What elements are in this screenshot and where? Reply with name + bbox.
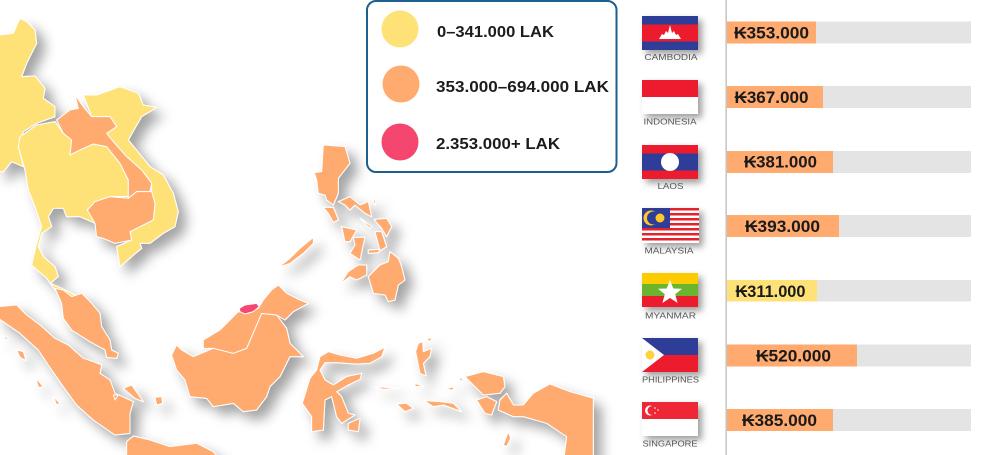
country: Cambodia [87, 192, 155, 243]
country: Philippines [278, 145, 405, 302]
row: Indonesia: INDONESIA [644, 118, 697, 126]
flag: Malaysia [642, 208, 699, 243]
bar: Indonesia: ₭367.000 [734, 89, 808, 107]
bar: Philippines: ₭520.000 [756, 348, 831, 366]
country: Vietnam [83, 87, 178, 267]
legend item: orange range [382, 66, 609, 102]
row: Singapore: SINGAPORE [642, 440, 698, 448]
flag: Singapore [642, 402, 698, 436]
island: Sumatra [0, 305, 133, 435]
bar: Laos [727, 151, 971, 173]
row: Indonesia [642, 80, 971, 126]
country: peninsular Malaysia [55, 288, 118, 358]
country: Laos [57, 95, 152, 198]
flag: Indonesia [642, 80, 698, 114]
island: Kalimantan [172, 313, 303, 412]
legend item: red range [382, 124, 560, 160]
legend item: orange range: 353.000–694.000 LAK [436, 79, 609, 96]
row: Philippines: PHILIPPINES [642, 376, 699, 384]
bar: Philippines [727, 344, 971, 366]
row: Malaysia [642, 208, 971, 256]
bar: Singapore [727, 409, 971, 431]
islands: west of Sumatra [2, 335, 163, 405]
region: Malaysian Borneo [203, 285, 308, 353]
row: Laos [642, 145, 971, 191]
row: Singapore [642, 402, 971, 448]
legend item: red range: 2.353.000+ LAK [436, 136, 560, 153]
bar: Cambodia [727, 22, 971, 44]
bar: Myanmar: ₭311.000 [736, 283, 806, 301]
row: Philippines [642, 338, 971, 384]
bar: Laos: ₭381.000 [744, 154, 817, 172]
bar: Cambodia: ₭353.000 [734, 24, 809, 42]
row: Myanmar [642, 273, 971, 320]
row: Laos: LAOS [658, 182, 684, 191]
island: Sulawesi [302, 347, 385, 432]
island: Java [127, 436, 220, 455]
flag: Laos [642, 145, 698, 179]
row: Malaysia: MALAYSIA [644, 246, 694, 256]
bar: Myanmar [727, 280, 971, 302]
map: Philippines and eastern Indonesia [278, 145, 593, 455]
country: Myanmar [0, 18, 55, 172]
legend item: yellow range: 0–341.000 LAK [437, 24, 554, 41]
bar: Singapore: ₭385.000 [742, 412, 817, 430]
chart axis [726, 0, 727, 455]
row: Cambodia: CAMBODIA [644, 53, 698, 62]
island: Papua [458, 372, 593, 455]
flag: Philippines [642, 338, 698, 372]
map: Southeast Asia wage levels [0, 18, 593, 455]
country: Thailand [18, 122, 128, 305]
bar: Malaysia [727, 215, 971, 237]
bar: Malaysia: ₭393.000 [745, 218, 820, 236]
row: Myanmar: MYANMAR [645, 312, 696, 320]
flag: Myanmar [642, 273, 698, 307]
bar: Indonesia [727, 86, 971, 108]
islands: Maluku [348, 338, 462, 432]
legend panel [367, 1, 616, 172]
map: Malaysia, Sumatra and Borneo [0, 285, 308, 455]
row: Cambodia [642, 16, 971, 62]
country: Brunei [239, 303, 259, 314]
map: mainland countries [0, 18, 178, 305]
flag: Cambodia [642, 16, 698, 50]
legend item: yellow range [382, 10, 554, 48]
